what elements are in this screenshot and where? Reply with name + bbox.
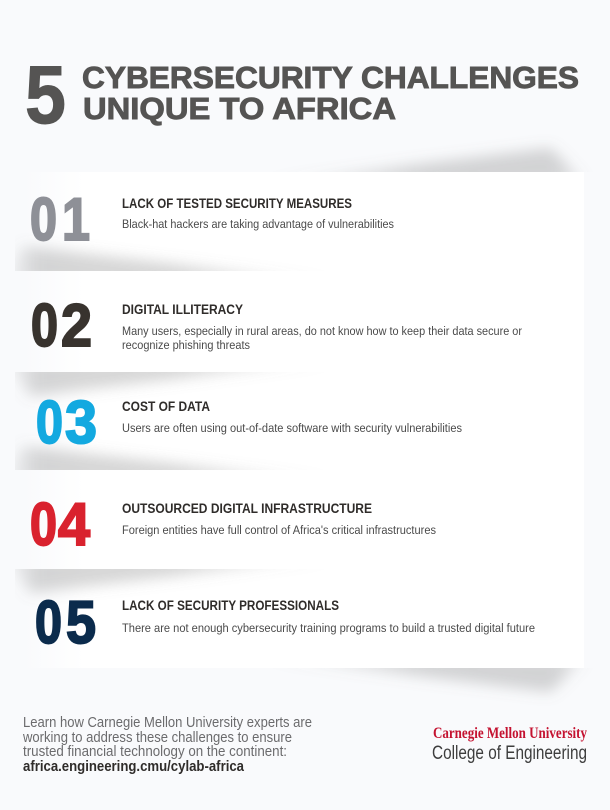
challenge 02: 2 (61, 292, 92, 359)
challenge 05: 5 (66, 589, 96, 656)
panel: challenges card (15, 196, 534, 644)
challenge 02: Many users, especially in rural areas, do not know how to keep their data secure or (122, 324, 522, 338)
challenge 05 (35, 589, 535, 656)
challenge 04: 4 (58, 491, 91, 558)
title: CYBERSECURITY CHALLENGES (82, 60, 579, 95)
title: 5 (25, 48, 66, 141)
challenge 04: Foreign entities have full control of Africa's critical infrastructures (122, 523, 436, 537)
title (25, 48, 579, 141)
challenge 02: recognize phishing threats (122, 338, 250, 352)
challenge 01: LACK OF TESTED SECURITY MEASURES (122, 196, 352, 211)
challenge 04: 0 (30, 491, 57, 558)
challenge 02: 0 (31, 292, 58, 359)
challenge 02 (31, 292, 522, 359)
challenge 03 (36, 389, 462, 456)
footer call to action: Learn how Carnegie Mellon University experts are (23, 715, 312, 731)
challenge 01: 1 (62, 186, 90, 253)
title: UNIQUE TO AFRICA (83, 91, 396, 126)
row separator shadow 4 (15, 569, 250, 596)
logo: Carnegie Mellon University College of Engineering (432, 725, 587, 764)
footer call to action: working to address these challenges to ensure (22, 730, 292, 746)
panel: shadow below card (343, 668, 578, 696)
challenge 03: 0 (36, 389, 63, 456)
challenge 04 (30, 491, 436, 558)
challenge 03: Users are often using out-of-date software with security vulnerabilities (122, 421, 462, 435)
row separator shadow 3 (15, 443, 248, 470)
challenge 01 (30, 186, 394, 253)
challenge 03: 3 (65, 389, 97, 456)
challenge 01: Black-hat hackers are taking advantage of vulnerabilities (122, 217, 394, 231)
row separator shadow 1 (15, 243, 250, 271)
footer call to action: trusted financial technology on the continent: (23, 744, 287, 760)
footer call to action (22, 715, 312, 775)
challenge 05: There are not enough cybersecurity training programs to build a trusted digital future (122, 621, 535, 635)
challenge 05: LACK OF SECURITY PROFESSIONALS (122, 598, 339, 613)
challenge 04: OUTSOURCED DIGITAL INFRASTRUCTURE (122, 501, 372, 516)
challenge 03: COST OF DATA (122, 399, 210, 414)
panel: shadow above card (343, 144, 578, 172)
row separator shadow 2 (15, 372, 250, 400)
challenge 02: DIGITAL ILLITERACY (122, 302, 243, 317)
challenge 05: 0 (35, 589, 62, 656)
challenge 01: 0 (30, 186, 57, 253)
footer call to action: africa.engineering.cmu/cylab-africa (23, 759, 245, 775)
